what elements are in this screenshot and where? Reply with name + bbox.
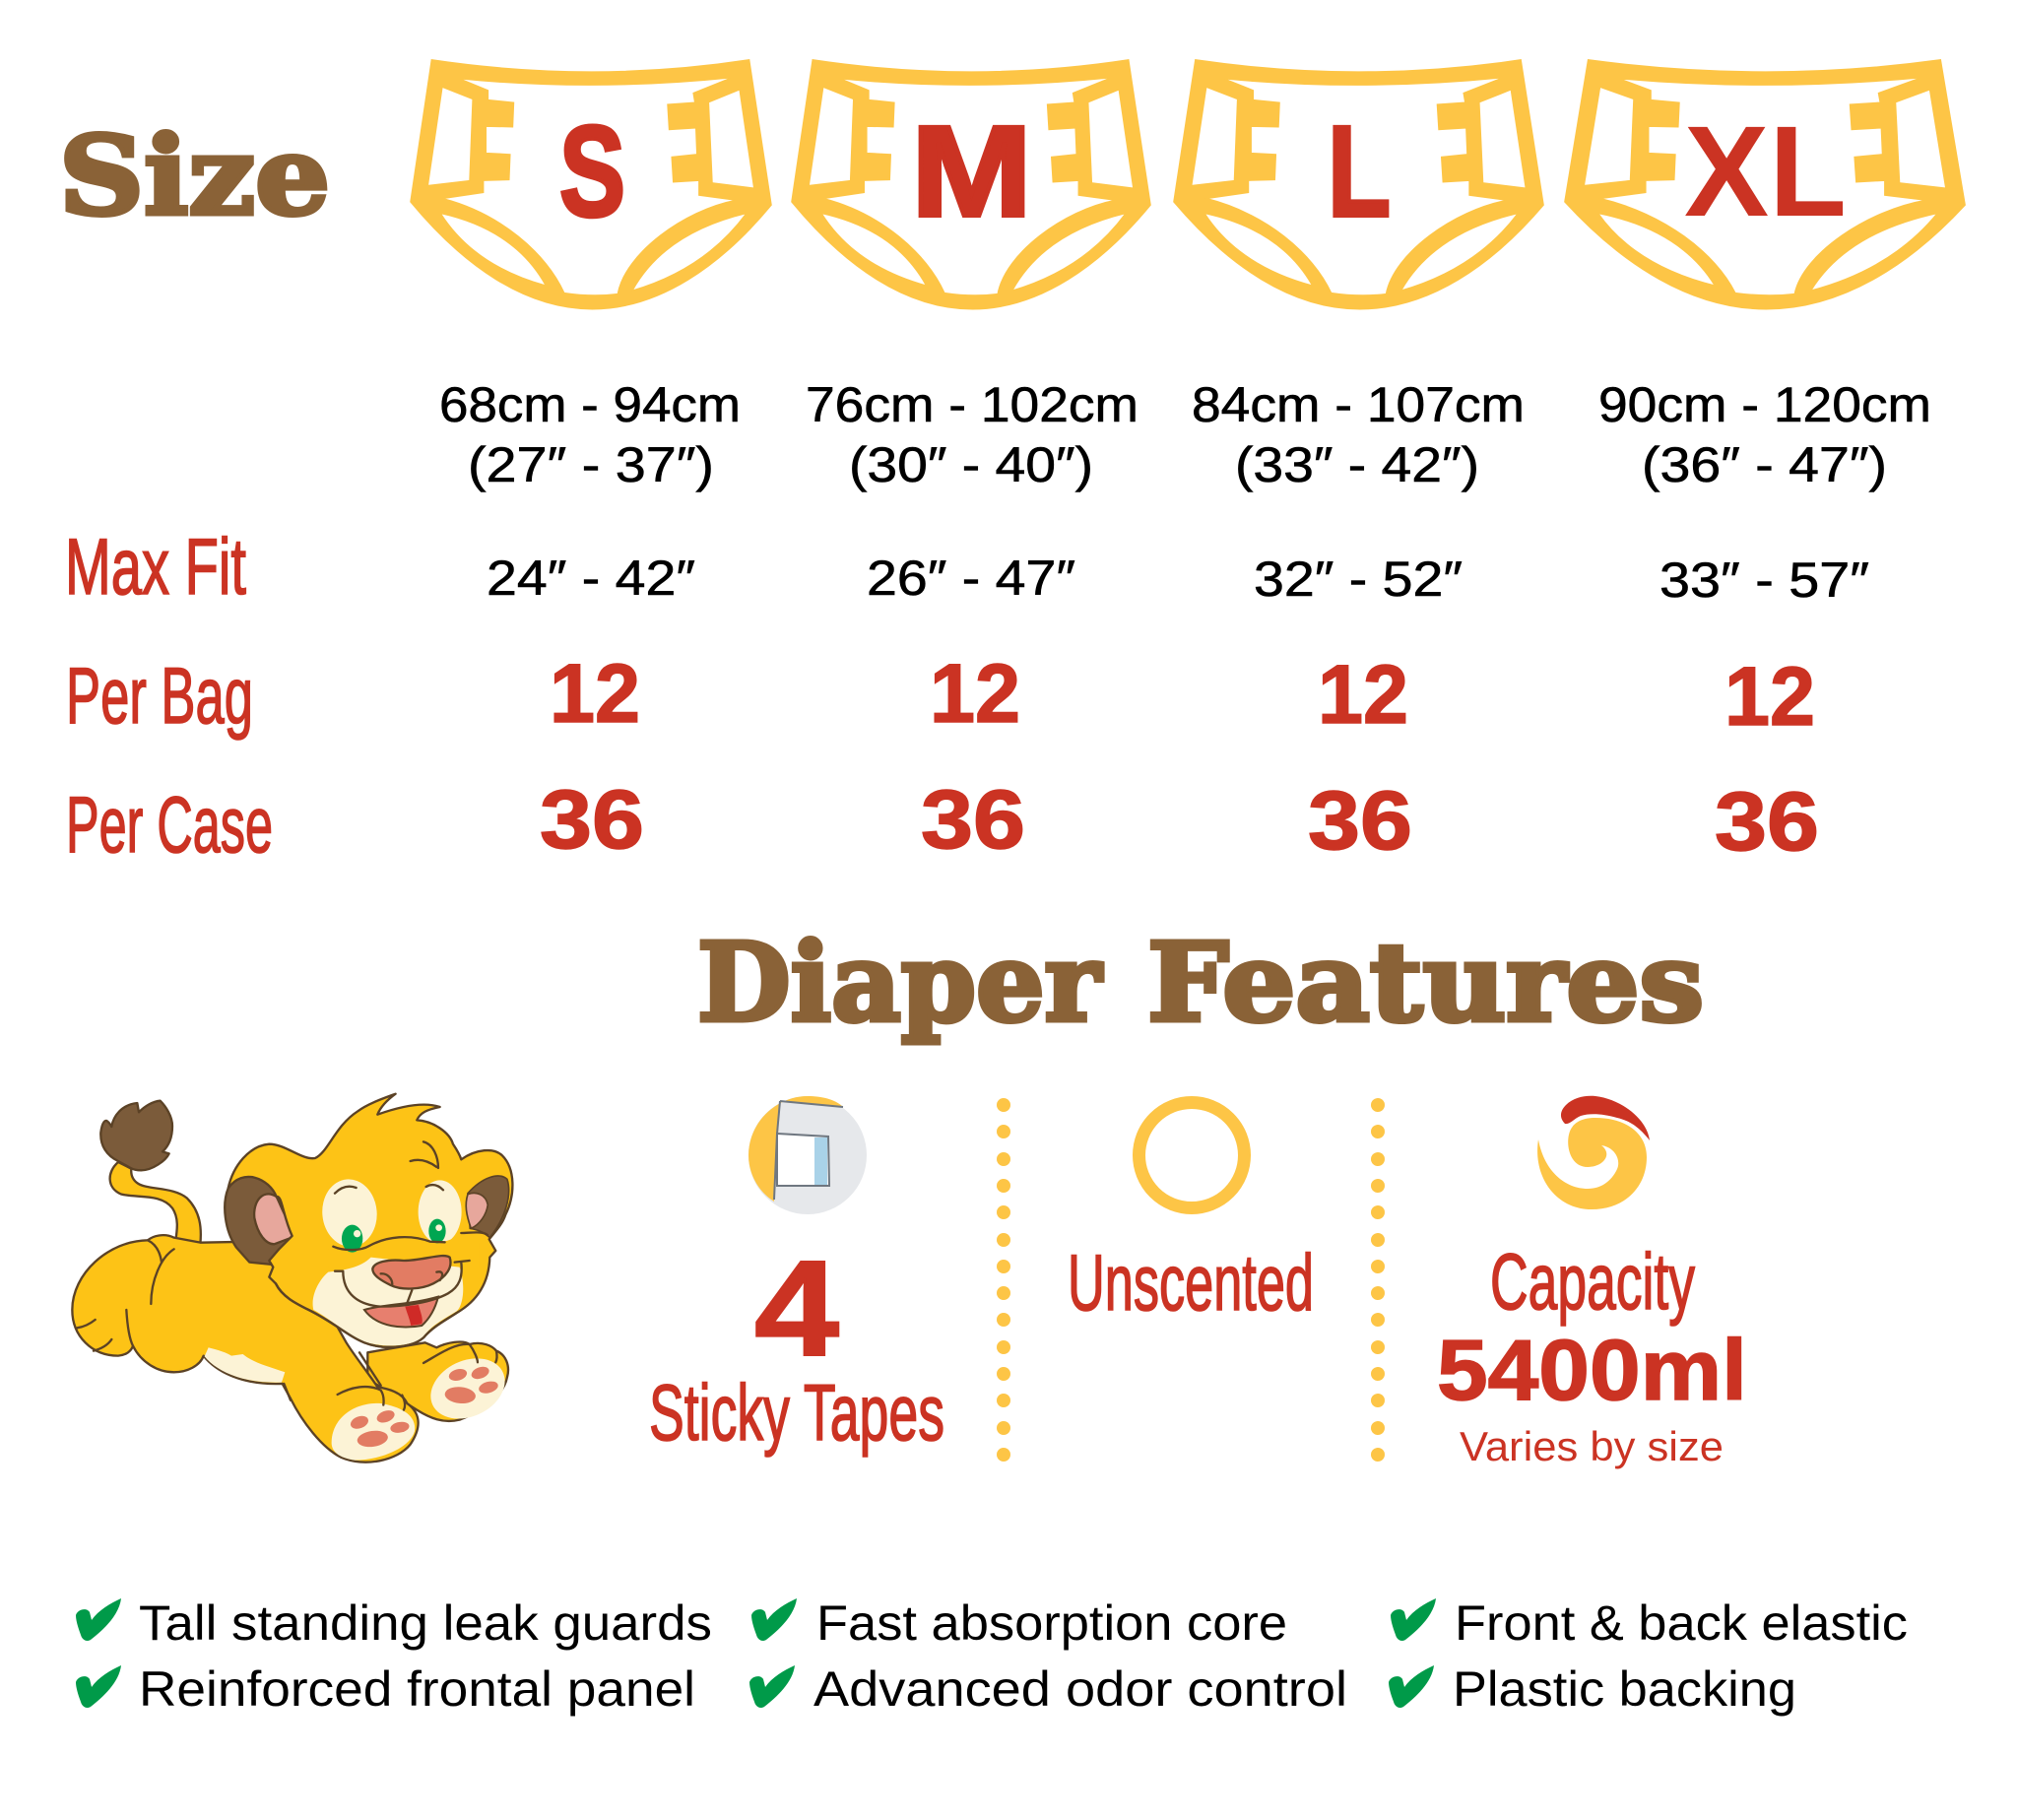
dotted divider 1 <box>997 1098 1010 1462</box>
checklist item: Front & back elastic: Front & back elastic <box>1455 1595 1908 1651</box>
diaper icon: L <box>1174 60 1543 309</box>
heading: Size: Size <box>59 112 330 239</box>
icon: capacity swirl <box>1537 1096 1650 1209</box>
checklist item: Fast absorption core: Fast absorption core <box>816 1595 1287 1651</box>
lion body <box>72 1235 419 1462</box>
waist sizes: XL: 90cm - 120cm <box>1598 377 1931 432</box>
lion right ear <box>466 1176 509 1238</box>
feature: 4 Sticky Tapes: 4 <box>754 1233 839 1385</box>
diaper icon: L: L <box>1328 98 1391 243</box>
checklist item: Plastic backing: Plastic backing <box>1453 1661 1796 1717</box>
lion cub mascot <box>72 1094 515 1462</box>
per bag values: 12 <box>1318 648 1408 741</box>
lion body detail lines <box>77 1240 405 1410</box>
waist sizes: XL: (36″ - 47″) <box>1642 437 1887 492</box>
waist sizes: L: (33″ - 42″) <box>1235 437 1479 492</box>
row label: Max Fit: Max Fit <box>65 523 246 612</box>
waist sizes: S <box>439 377 741 492</box>
per bag values <box>550 647 1815 743</box>
heading: Diaper Features: Diaper <box>697 919 1103 1046</box>
waist sizes: S: (27″ - 37″) <box>468 437 714 492</box>
feature: Capacity 5400ml: 5400ml <box>1437 1323 1747 1418</box>
heading: Diaper Features: Features <box>1147 919 1704 1046</box>
feature: Capacity 5400ml <box>1437 1238 1747 1469</box>
lion ear left <box>225 1174 298 1265</box>
waist sizes: L <box>1192 377 1525 492</box>
per bag values: 12 <box>1724 650 1815 743</box>
lion head <box>228 1094 512 1347</box>
checklist item: Advanced odor control: Advanced odor control <box>813 1661 1347 1717</box>
max fit values: 32″ - 52″ <box>1254 552 1463 607</box>
dotted divider 2 <box>1371 1098 1385 1462</box>
waist sizes: M: 76cm - 102cm <box>806 377 1139 432</box>
per case values: 36 <box>1308 774 1412 867</box>
waist sizes: M <box>806 377 1139 492</box>
diaper icon: S: S <box>559 98 625 243</box>
waist sizes: S: 68cm - 94cm <box>439 377 741 432</box>
feature: Capacity 5400ml: Varies by size <box>1460 1423 1724 1469</box>
row label: Per Bag: Per Bag <box>66 652 253 741</box>
per case values <box>540 773 1819 868</box>
feature: Unscented: Unscented <box>1068 1239 1314 1328</box>
checklist item: Tall standing leak guards: Tall standing leak guards <box>139 1595 712 1651</box>
waist sizes: M: (30″ - 40″) <box>849 437 1093 492</box>
lion belly <box>205 1347 285 1383</box>
icon: unscented ring <box>1139 1103 1245 1207</box>
waist sizes: XL <box>1598 377 1931 492</box>
max fit values: 26″ - 47″ <box>867 551 1075 606</box>
heading: Diaper Features <box>697 919 1704 1046</box>
feature: 4 Sticky Tapes <box>649 1233 944 1458</box>
per case values: 36 <box>921 773 1025 866</box>
max fit values: 24″ - 42″ <box>487 551 695 606</box>
per case values: 36 <box>1715 775 1819 868</box>
waist sizes: L: 84cm - 107cm <box>1192 377 1525 432</box>
lion front paw pad <box>332 1403 415 1461</box>
diaper icon: M: M <box>911 98 1032 243</box>
lion tail <box>110 1162 201 1244</box>
lion face <box>276 1141 488 1347</box>
per case values: 36 <box>540 773 644 866</box>
feature: 4 Sticky Tapes: Sticky Tapes <box>649 1369 944 1458</box>
diaper icon: XL <box>1565 60 1965 309</box>
per bag values: 12 <box>550 647 640 740</box>
per bag values: 12 <box>930 647 1020 740</box>
max fit values <box>487 551 1869 608</box>
diaper icon: M <box>792 60 1150 309</box>
icon: sticky tape <box>748 1096 867 1214</box>
lion tail tuft <box>100 1101 172 1170</box>
checklist item: Reinforced frontal panel: Reinforced frontal panel <box>139 1661 695 1717</box>
max fit values: 33″ - 57″ <box>1659 552 1869 608</box>
row label: Per Case: Per Case <box>66 781 273 870</box>
diaper icon: XL: XL <box>1684 98 1847 243</box>
feature: Capacity 5400ml: Capacity <box>1490 1238 1695 1327</box>
lion back paw <box>359 1342 515 1430</box>
diaper icon: S <box>411 60 771 309</box>
